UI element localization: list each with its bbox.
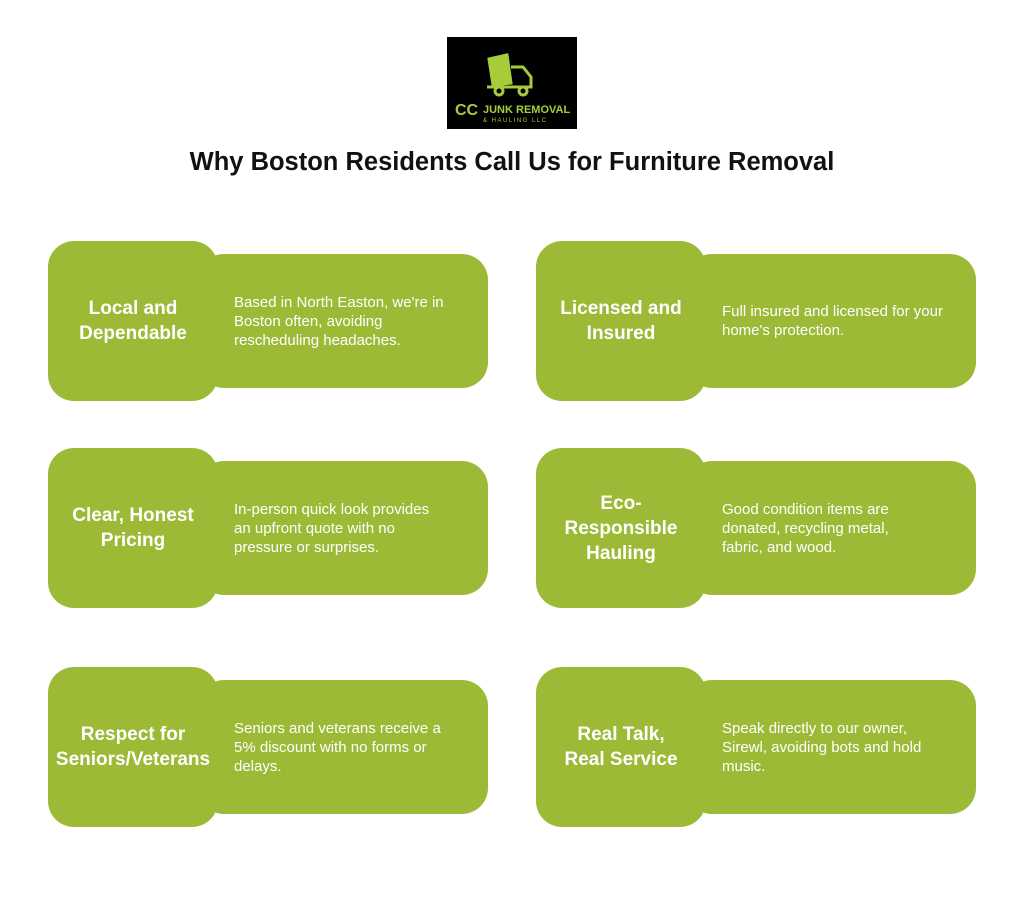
card: eco: Eco- — [600, 492, 642, 514]
card: pricing: Clear, Honest — [72, 505, 194, 526]
card: real talk: Real Service — [564, 749, 678, 770]
card: eco: fabric, and wood. — [722, 538, 836, 556]
card: pricing: In-person quick look provides — [234, 500, 429, 518]
card: eco — [536, 448, 976, 608]
card: real talk: Speak directly to our owner, — [722, 720, 907, 736]
card: seniors — [48, 667, 488, 827]
card: seniors: Respect for — [81, 724, 185, 745]
card: seniors: Seniors and veterans receive a — [234, 720, 441, 736]
card: eco: donated, recycling metal, — [722, 520, 889, 536]
card: licensed: Licensed and — [560, 298, 682, 319]
card: eco: Good condition items are — [722, 500, 889, 518]
card: real talk — [536, 667, 976, 827]
card: local: Boston often, avoiding — [234, 312, 382, 330]
card: seniors: delays. — [234, 758, 282, 774]
card: local: Local and — [89, 298, 177, 319]
title: Why Boston Residents Call Us for Furniture Removal — [190, 148, 834, 176]
card: real talk: music. — [722, 758, 765, 774]
card: eco: Hauling — [586, 542, 656, 564]
card: real talk: Real Talk, — [577, 724, 665, 745]
card: seniors: 5% discount with no forms or — [234, 738, 427, 756]
card: licensed: Full insured and licensed for your — [722, 303, 943, 320]
card: pricing — [48, 448, 488, 608]
logo: JUNK REMOVAL — [483, 104, 570, 116]
card: eco: Responsible — [564, 518, 677, 538]
card: licensed: home's protection. — [722, 322, 844, 339]
card: local: rescheduling headaches. — [234, 332, 401, 348]
card: seniors: Seniors/Veterans — [56, 749, 210, 770]
card: pricing: pressure or surprises. — [234, 538, 379, 556]
card: real talk: Sirewl, avoiding bots and hold — [722, 738, 921, 756]
icon: truck with bin — [487, 55, 531, 95]
card: pricing: Pricing — [101, 530, 165, 551]
logo — [447, 37, 577, 129]
card: local: Based in North Easton, we're in — [234, 294, 444, 310]
card: licensed — [536, 241, 976, 401]
card: local: Dependable — [79, 323, 187, 344]
card: local — [48, 241, 488, 401]
logo: & HAULING LLC — [483, 118, 548, 124]
logo: CC — [455, 102, 479, 119]
card: licensed: Insured — [587, 323, 655, 344]
card: pricing: an upfront quote with no — [234, 520, 395, 536]
